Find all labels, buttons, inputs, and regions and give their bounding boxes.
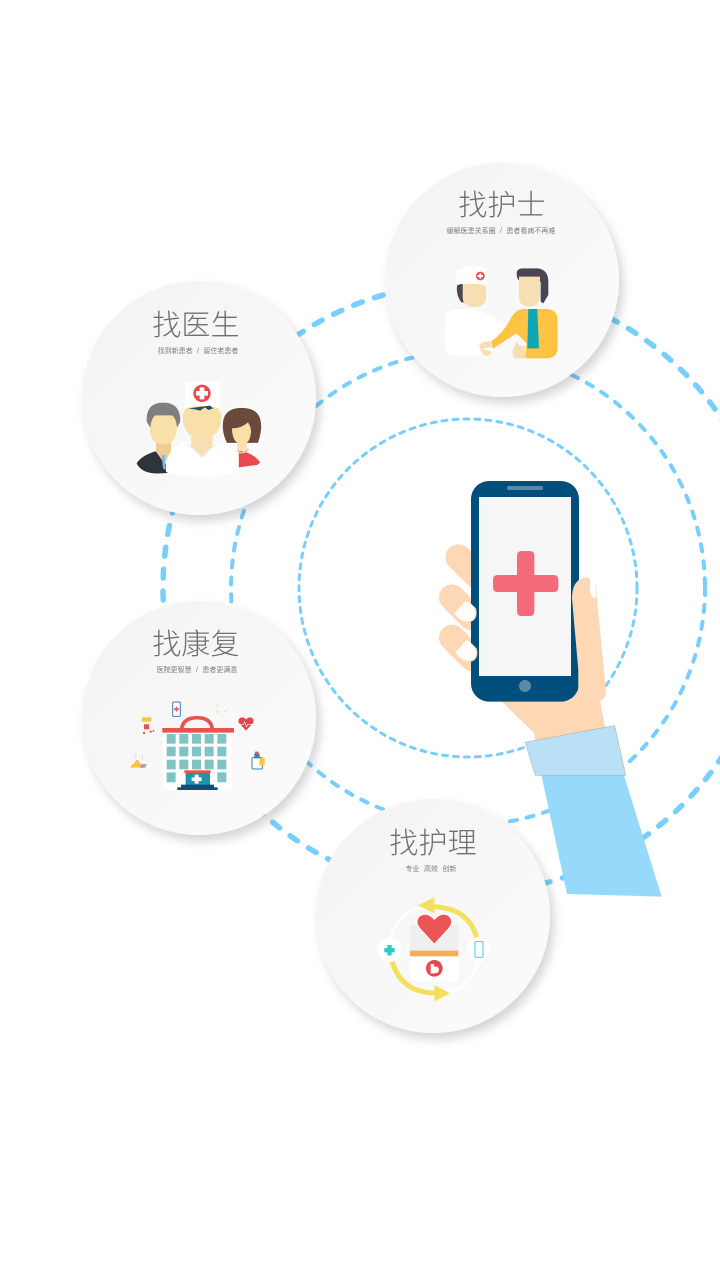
icon: hospital building [130, 702, 265, 790]
panel: find rehabilitation [82, 601, 316, 835]
hand palm [497, 670, 605, 742]
thumb [572, 578, 606, 702]
icon: doctor group [136, 382, 262, 477]
outer dashed ring [163, 283, 720, 893]
illustration: hand holding phone [452, 481, 662, 897]
subtitle: doctor: 找到新患者 / 留住老患者 [158, 346, 238, 355]
subtitle: rehabilitation: 医院更智慧 / 患者更满意 [157, 665, 237, 674]
inner dashed ring [299, 419, 637, 757]
subtitle: nurse: 缓解医患关系圈 / 患者看病不再难 [447, 226, 555, 235]
smartphone [471, 481, 579, 702]
icon: heart care cycle [377, 897, 491, 1001]
heading: find rehabilitation: 找康复 [152, 628, 240, 661]
panel: find nursing care [316, 799, 550, 1033]
fingernails [454, 601, 478, 662]
fingers [452, 557, 477, 658]
panel: find a nurse [385, 163, 619, 397]
heading: find a doctor: 找医生 [152, 309, 240, 342]
icon: red cross [493, 551, 558, 616]
subtitle: nursing care: 专业 高效 创新 [406, 864, 456, 873]
shirt cuff [525, 726, 626, 775]
panel: find a doctor [82, 281, 316, 515]
sleeve [541, 773, 662, 897]
middle dashed ring [231, 351, 705, 825]
thumbnail [590, 578, 596, 598]
icon: nurse and patient handshake [445, 266, 558, 358]
heading: find nursing care: 找护理 [389, 827, 477, 860]
heading: find a nurse: 找护士 [458, 189, 546, 222]
dashed rings [163, 283, 720, 893]
